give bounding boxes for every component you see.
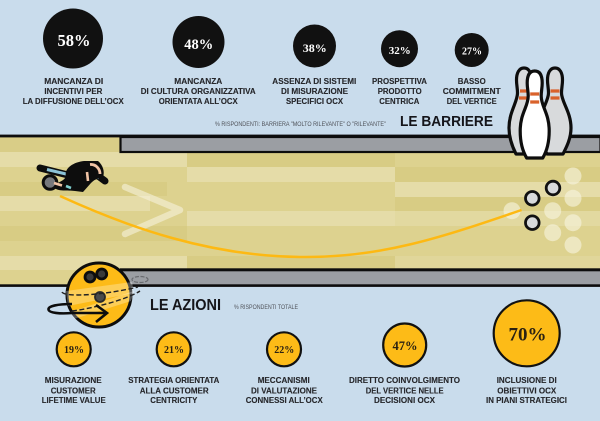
stat: 70%: 70%: [508, 324, 546, 346]
bowling lane: [0, 137, 600, 285]
stat: 47%: DECISIONI OCX: [374, 395, 435, 405]
stat: 19%: MISURAZIONE: [45, 375, 102, 385]
icon: rolling bowling ball: [48, 263, 148, 327]
stat: 32%: [372, 30, 427, 106]
panel: actions: [42, 300, 567, 405]
stat: 47%: 47%: [392, 339, 418, 353]
stat: 21%: 21%: [164, 345, 184, 356]
stat: 22%: [246, 332, 323, 405]
stat: 27%: [443, 33, 501, 106]
panel: barriers: [23, 8, 501, 106]
stat: 19%: [42, 332, 106, 405]
top gutter: [0, 135, 600, 152]
icon: bowler seen from above: [40, 161, 105, 192]
stat: 48%: MANCANZA: [174, 76, 222, 86]
stat: 70%: [486, 300, 567, 405]
heading: le barriere: LE BARRIERE: [400, 113, 493, 130]
front white pin: [520, 71, 549, 158]
stat: 47%: DEL VERTICE NELLE: [366, 385, 444, 395]
stat: 32%: PRODOTTO: [378, 86, 422, 96]
stat: 58%: [23, 8, 124, 106]
stat: 47%: DIRETTO COINVOLGIMENTO: [349, 375, 460, 385]
stat: 21%: [128, 332, 219, 405]
bottom gutter: [0, 268, 600, 287]
stat: 70%: OBIETTIVI OCX: [497, 385, 557, 395]
aiming chevron: [125, 187, 180, 234]
back left pin: [509, 68, 539, 154]
stat: 48%: DI CULTURA ORGANIZZATIVA: [141, 86, 256, 96]
ball trajectory: [60, 196, 522, 257]
stat: 48%: [141, 16, 256, 106]
stat: 38%: ASSENZA DI SISTEMI: [272, 76, 356, 86]
stat: 21%: CENTRICITY: [150, 395, 198, 405]
stat: 58%: MANCANZA DI: [44, 76, 103, 86]
standing pins from above: [526, 181, 560, 230]
stat: 19%: 19%: [64, 345, 84, 356]
stat: 38%: DI MISURAZIONE: [281, 86, 348, 96]
stat: 27%: COMMITMENT: [443, 86, 501, 96]
stat: 48%: ORIENTATA ALL’OCX: [159, 96, 238, 106]
stat: 38%: SPECIFICI OCX: [286, 96, 343, 106]
stat: 58%: INCENTIVI PER: [44, 86, 103, 96]
actions footnote: % RISPONDENTI TOTALE: [234, 304, 298, 311]
heading: le azioni: LE AZIONI: [150, 297, 221, 314]
barriers footnote: % RISPONDENTI: BARRIERA "MOLTO RILEVANTE" O "RILEVANTE": [215, 121, 387, 128]
stat: 48%: 48%: [184, 37, 213, 53]
stat: 70%: INCLUSIONE DI: [497, 375, 557, 385]
stat: 58%: LA DIFFUSIONE DELL’OCX: [23, 96, 124, 106]
stat: 27%: BASSO: [458, 76, 486, 86]
faded fallen pins: [504, 168, 582, 254]
stat: 70%: IN PIANI STRATEGICI: [486, 395, 567, 405]
stat: 32%: 32%: [389, 45, 411, 57]
stat: 27%: 27%: [462, 46, 482, 58]
stat: 38%: [272, 24, 356, 106]
stat: 21%: STRATEGIA ORIENTATA: [128, 375, 219, 385]
stat: 47%: [349, 324, 460, 405]
stat: 22%: DI VALUTAZIONE: [251, 385, 317, 395]
stat: 32%: CENTRICA: [379, 96, 419, 106]
stat: 21%: ALLA CUSTOMER: [140, 385, 209, 395]
back right pin: [539, 68, 571, 154]
stat: 38%: 38%: [303, 41, 327, 55]
stat: 32%: PROSPETTIVA: [372, 76, 427, 86]
stat: 19%: LIFETIME VALUE: [42, 395, 106, 405]
stat: 22%: CONNESSI ALL’OCX: [246, 395, 323, 405]
stat: 27%: DEL VERTICE: [447, 96, 497, 106]
icon: three bowling pins: [509, 68, 571, 158]
stat: 58%: 58%: [58, 31, 90, 50]
stat: 22%: 22%: [274, 345, 294, 356]
stat: 19%: CUSTOMER: [51, 385, 96, 395]
stat: 22%: MECCANISMI: [258, 375, 310, 385]
